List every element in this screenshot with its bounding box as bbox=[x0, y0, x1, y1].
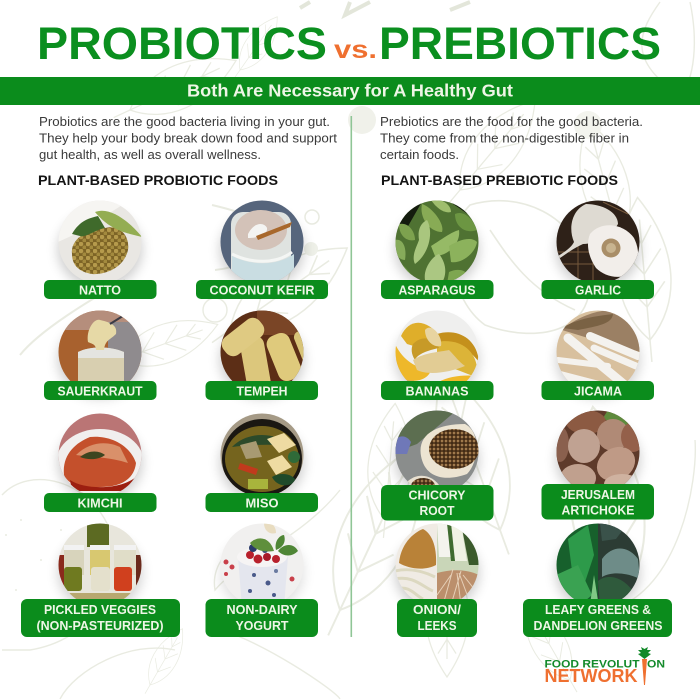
subtitle banner bbox=[0, 77, 700, 105]
food card: natto bbox=[44, 200, 156, 299]
probiotics description: gut health, as well as overall wellness. bbox=[39, 148, 261, 162]
heading: probiotic foods: PLANT-BASED PROBIOTIC FOODS bbox=[38, 172, 278, 188]
food card: tempeh bbox=[206, 310, 318, 400]
photo: non-dairy yogurt bbox=[220, 524, 300, 599]
food card: jerusalem artichoke bbox=[542, 410, 654, 520]
title word: prebiotics: PREBIOTICS bbox=[379, 18, 661, 69]
photo: leafy greens bbox=[556, 524, 640, 599]
label: tempeh: TEMPEH bbox=[236, 384, 288, 398]
photo: kimchi bbox=[58, 414, 142, 493]
label: natto: NATTO bbox=[79, 282, 121, 298]
food card: miso bbox=[206, 413, 318, 512]
prebiotics description: Prebiotics are the food for the good bacteria. bbox=[380, 115, 643, 129]
food card: onion and leeks bbox=[395, 523, 479, 637]
photo: bananas bbox=[396, 310, 478, 381]
food card: sauerkraut bbox=[44, 310, 156, 400]
label: non-dairy yogurt: NON-DAIRY bbox=[226, 602, 298, 617]
photo: natto bbox=[58, 200, 142, 284]
food card: asparagus bbox=[381, 200, 494, 299]
label: chicory root: CHICORY bbox=[408, 488, 466, 502]
title bbox=[37, 18, 661, 69]
label: onion and leeks bbox=[397, 599, 477, 637]
label: pickled veggies: PICKLED VEGGIES bbox=[44, 602, 156, 617]
food card: jicama bbox=[542, 310, 654, 400]
label: kimchi: KIMCHI bbox=[78, 496, 122, 510]
heading: prebiotic foods: PLANT-BASED PREBIOTIC FOODS bbox=[381, 172, 618, 188]
label: leafy greens: LEAFY GREENS & bbox=[545, 602, 651, 617]
label: onion and leeks: ONION/ bbox=[413, 602, 461, 617]
prebiotics description: certain foods. bbox=[380, 148, 459, 162]
photo: chicory root bbox=[396, 410, 478, 485]
probiotics description: They help your body break down food and support bbox=[39, 132, 338, 146]
prebiotics description: They come from the non-digestible fiber in bbox=[380, 132, 629, 146]
photo: pickled veggies bbox=[58, 524, 142, 599]
logo: food revolution network bbox=[544, 647, 665, 686]
photo: tempeh bbox=[220, 310, 304, 381]
label: coconut kefir: COCONUT KEFIR bbox=[210, 282, 315, 298]
label: pickled veggies bbox=[21, 599, 180, 637]
label: miso: MISO bbox=[246, 496, 278, 510]
food card: kimchi bbox=[44, 413, 156, 512]
photo: onion and leeks bbox=[396, 524, 478, 599]
label: chicory root: ROOT bbox=[420, 503, 455, 518]
title word: vs.: vs. bbox=[334, 36, 377, 64]
logo text: on: ON bbox=[647, 658, 665, 670]
photo: jerusalem artichoke bbox=[556, 410, 640, 484]
photo: miso bbox=[220, 413, 304, 499]
label: garlic: GARLIC bbox=[575, 282, 622, 298]
logo text: network: NETWORK bbox=[544, 666, 638, 686]
icon: carrot bbox=[638, 647, 651, 685]
photo: garlic bbox=[556, 200, 640, 284]
label: leafy greens: DANDELION GREENS bbox=[534, 618, 663, 633]
label: onion and leeks: LEEKS bbox=[418, 618, 457, 633]
food card: garlic bbox=[542, 200, 654, 299]
photo: coconut kefir bbox=[220, 200, 304, 284]
food card: leafy greens bbox=[523, 523, 672, 637]
food card: bananas bbox=[381, 310, 494, 400]
title word: probiotics: PROBIOTICS bbox=[37, 18, 327, 69]
photo: jicama bbox=[556, 310, 640, 381]
label: jerusalem artichoke: ARTICHOKE bbox=[562, 502, 635, 518]
food card: non-dairy yogurt bbox=[206, 522, 318, 637]
food card: pickled veggies bbox=[21, 523, 180, 637]
food card: coconut kefir bbox=[196, 200, 328, 299]
label: jicama: JICAMA bbox=[574, 384, 623, 398]
label: jerusalem artichoke bbox=[542, 484, 654, 520]
label: bananas: BANANAS bbox=[406, 384, 469, 398]
label: sauerkraut: SAUERKRAUT bbox=[58, 384, 143, 398]
food card: chicory root bbox=[381, 410, 494, 520]
photo: asparagus bbox=[394, 200, 479, 284]
label: pickled veggies: (NON-PASTEURIZED) bbox=[36, 618, 164, 633]
label: non-dairy yogurt: YOGURT bbox=[236, 618, 289, 633]
label: asparagus: ASPARAGUS bbox=[398, 282, 476, 298]
label: non-dairy yogurt bbox=[206, 599, 318, 637]
label: chicory root bbox=[381, 485, 494, 520]
logo text: food revolut: FOOD REVOLUT bbox=[544, 658, 640, 670]
photo: sauerkraut bbox=[58, 310, 142, 381]
probiotics description: Probiotics are the good bacteria living in your gut. bbox=[39, 115, 330, 129]
label: jerusalem artichoke: JERUSALEM bbox=[561, 487, 635, 502]
column divider bbox=[350, 116, 352, 637]
label: leafy greens bbox=[523, 599, 672, 637]
subtitle banner: Both Are Necessary for A Healthy Gut bbox=[187, 80, 513, 100]
